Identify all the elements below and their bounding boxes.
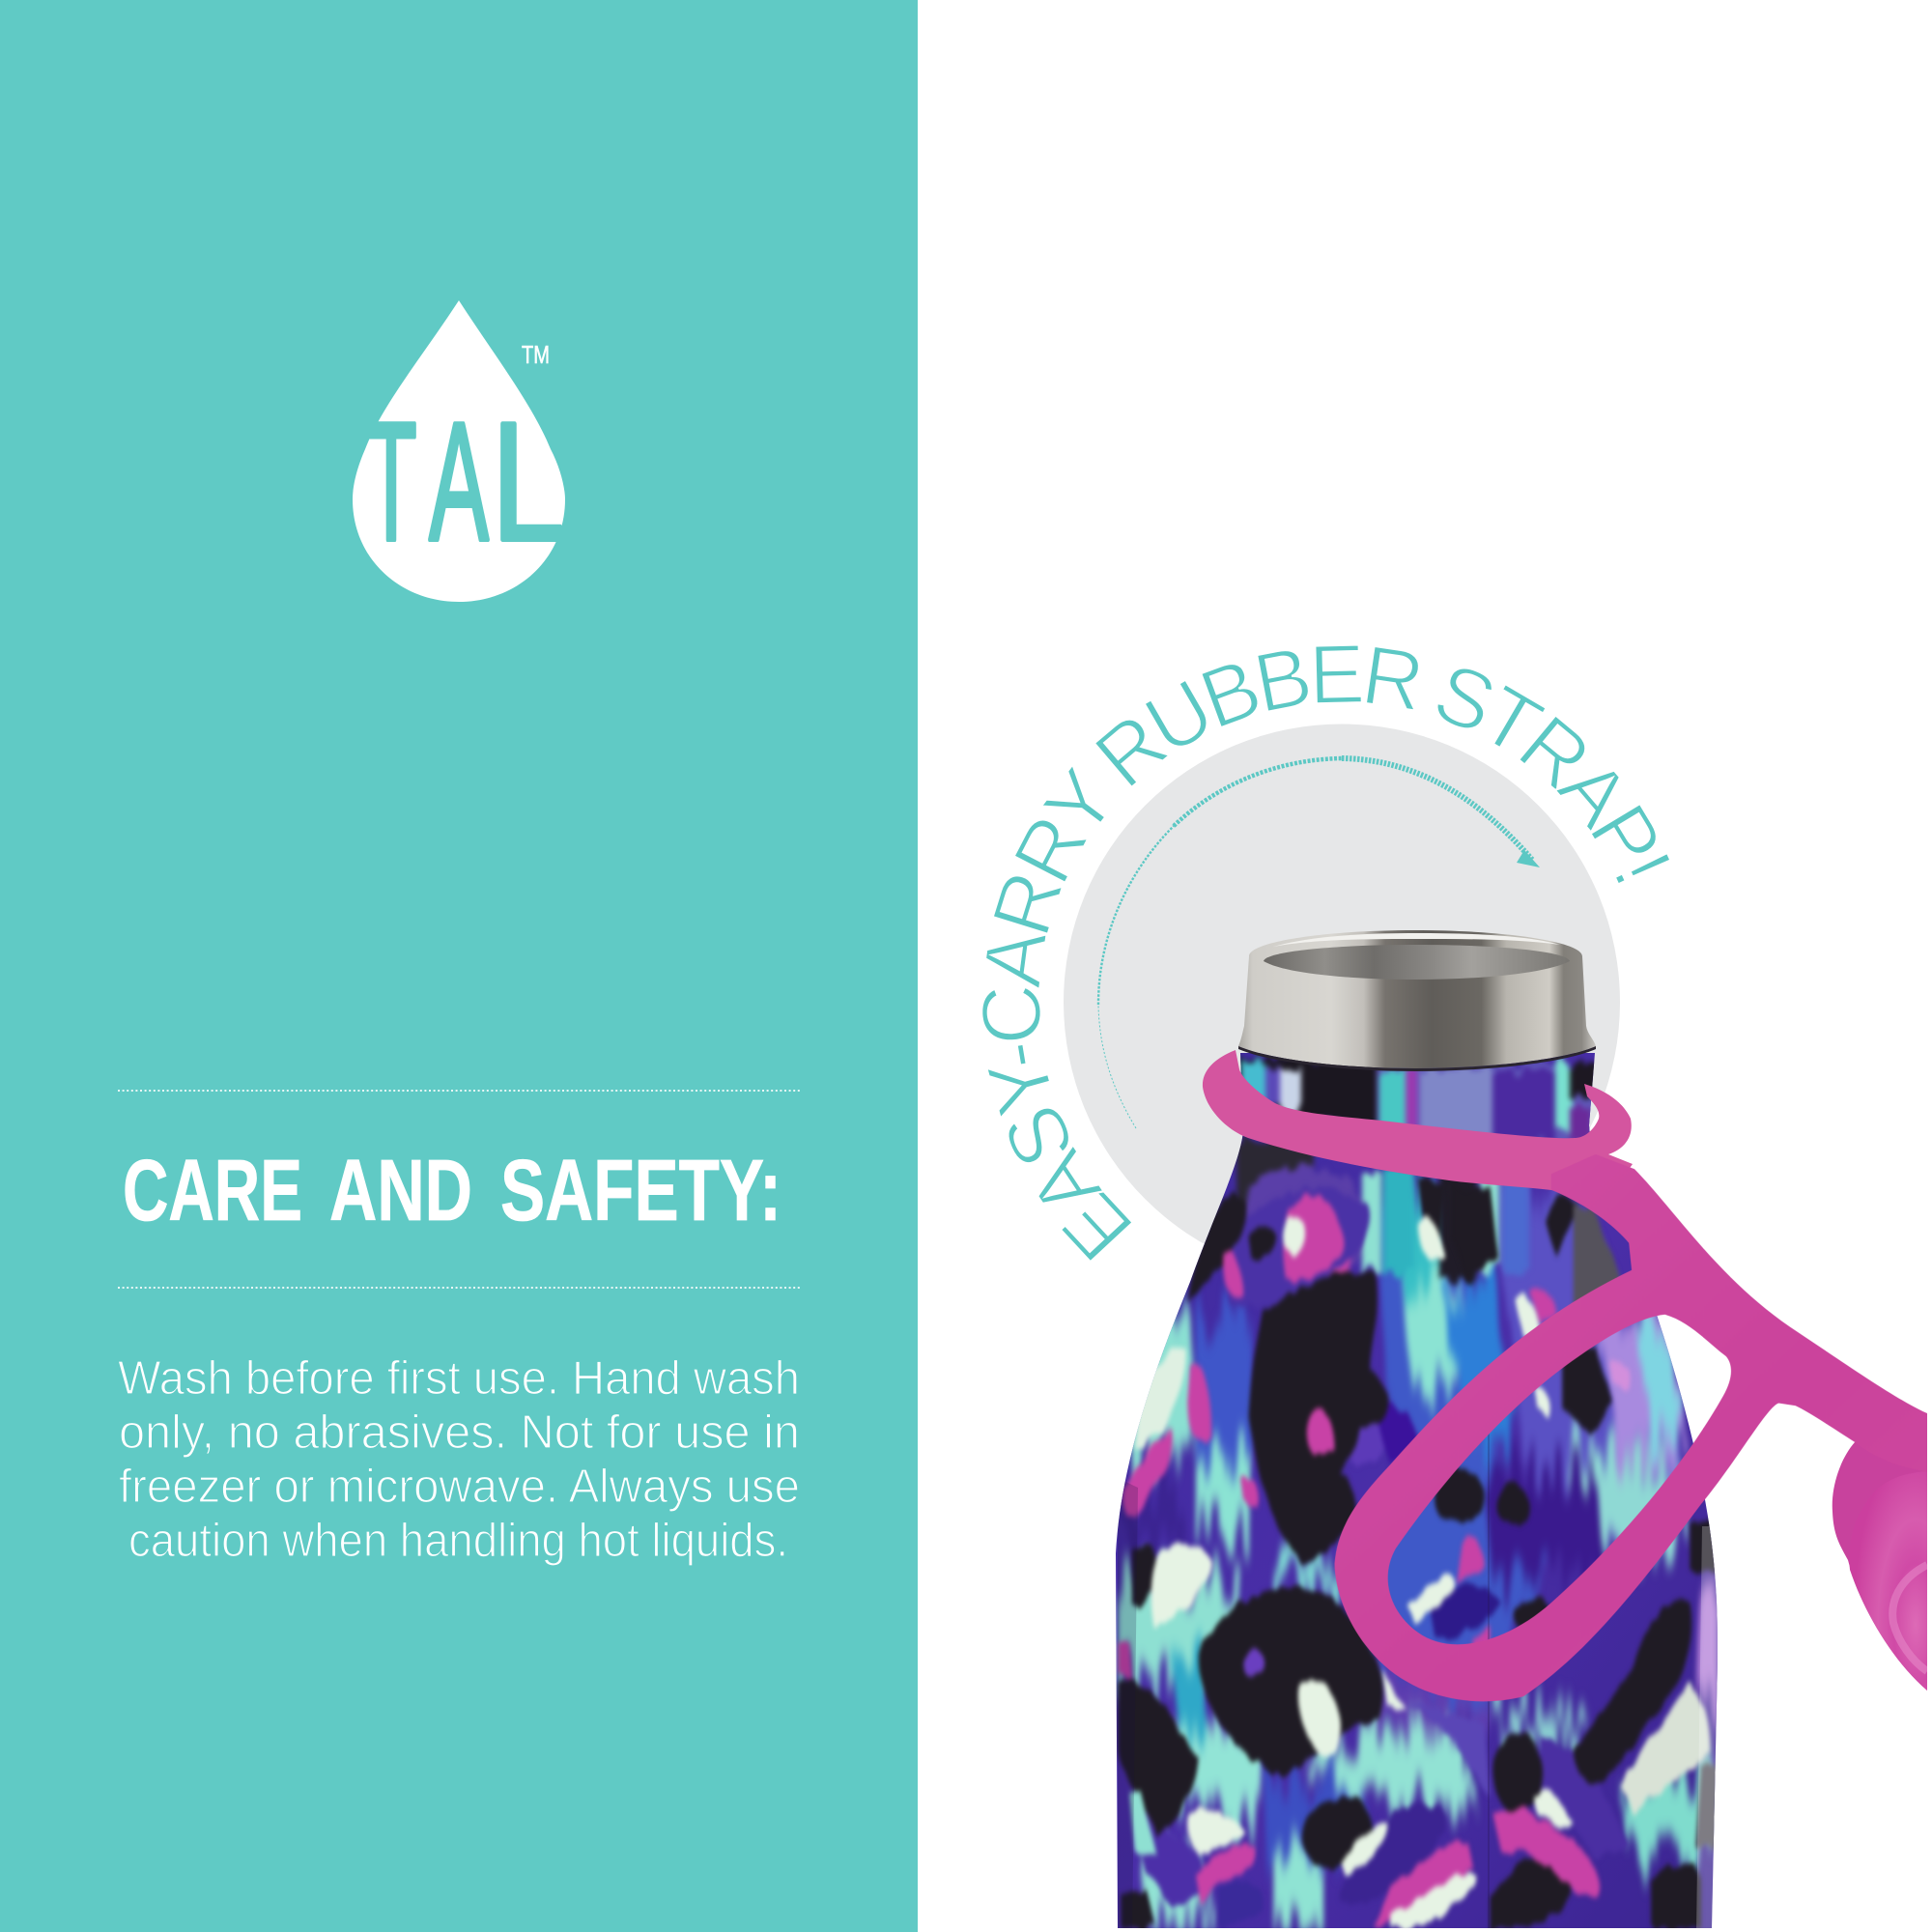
logo wordmark: TAL: A <box>429 387 489 576</box>
trademark: TM <box>522 340 550 369</box>
text block: care instructions: freezer or microwave. Always use <box>119 1461 800 1513</box>
purple blobs <box>1229 1187 1370 1308</box>
neck pattern <box>1227 1058 1599 1290</box>
curved headline: easy-carry rubber strap: EASY-CARRY RUBBER STRAP! <box>982 645 1669 1261</box>
strap: handle loop and band <box>1335 1154 1932 1701</box>
icon: water drop <box>353 300 565 602</box>
logo: TAL water drop <box>353 300 565 602</box>
grey circle backdrop <box>1064 724 1620 1281</box>
strap: neck ring <box>1203 1050 1633 1198</box>
heading: care and safety: CARE <box>123 1143 302 1239</box>
bottle seam <box>1488 1434 1490 1928</box>
text block: care instructions: caution when handling hot liquids. <box>128 1515 788 1567</box>
logo wordmark: TAL: L <box>492 388 564 576</box>
divider bottom <box>118 1287 800 1289</box>
pink blobs <box>1118 1195 1631 1928</box>
text block: care instructions: Wash before first use. Hand wash <box>118 1352 800 1405</box>
bottle <box>1111 1053 1729 1932</box>
heading: care and safety: AND <box>329 1143 472 1239</box>
heading: care and safety: SAFETY: <box>500 1143 781 1239</box>
text block: care instructions: only, no abrasives. Not for use in <box>119 1406 800 1459</box>
strap: cap knob <box>1833 1439 1927 1690</box>
logo wordmark: TAL <box>365 387 564 576</box>
logo wordmark: TAL: T <box>365 388 417 576</box>
arrow: dotted arc <box>1098 758 1540 1128</box>
text block: care instructions <box>118 1352 800 1567</box>
panel: teal left column <box>0 0 918 1932</box>
cream blobs <box>1129 1216 1710 1928</box>
heading: care and safety <box>123 1143 781 1239</box>
steel bottle mouth <box>1238 930 1596 1071</box>
painted colour fields <box>1118 1189 1718 1928</box>
divider top <box>118 1090 800 1092</box>
bottle blobs <box>1118 1179 1718 1928</box>
black blobs <box>1118 1179 1718 1928</box>
bottle shading <box>1118 1478 1719 1932</box>
